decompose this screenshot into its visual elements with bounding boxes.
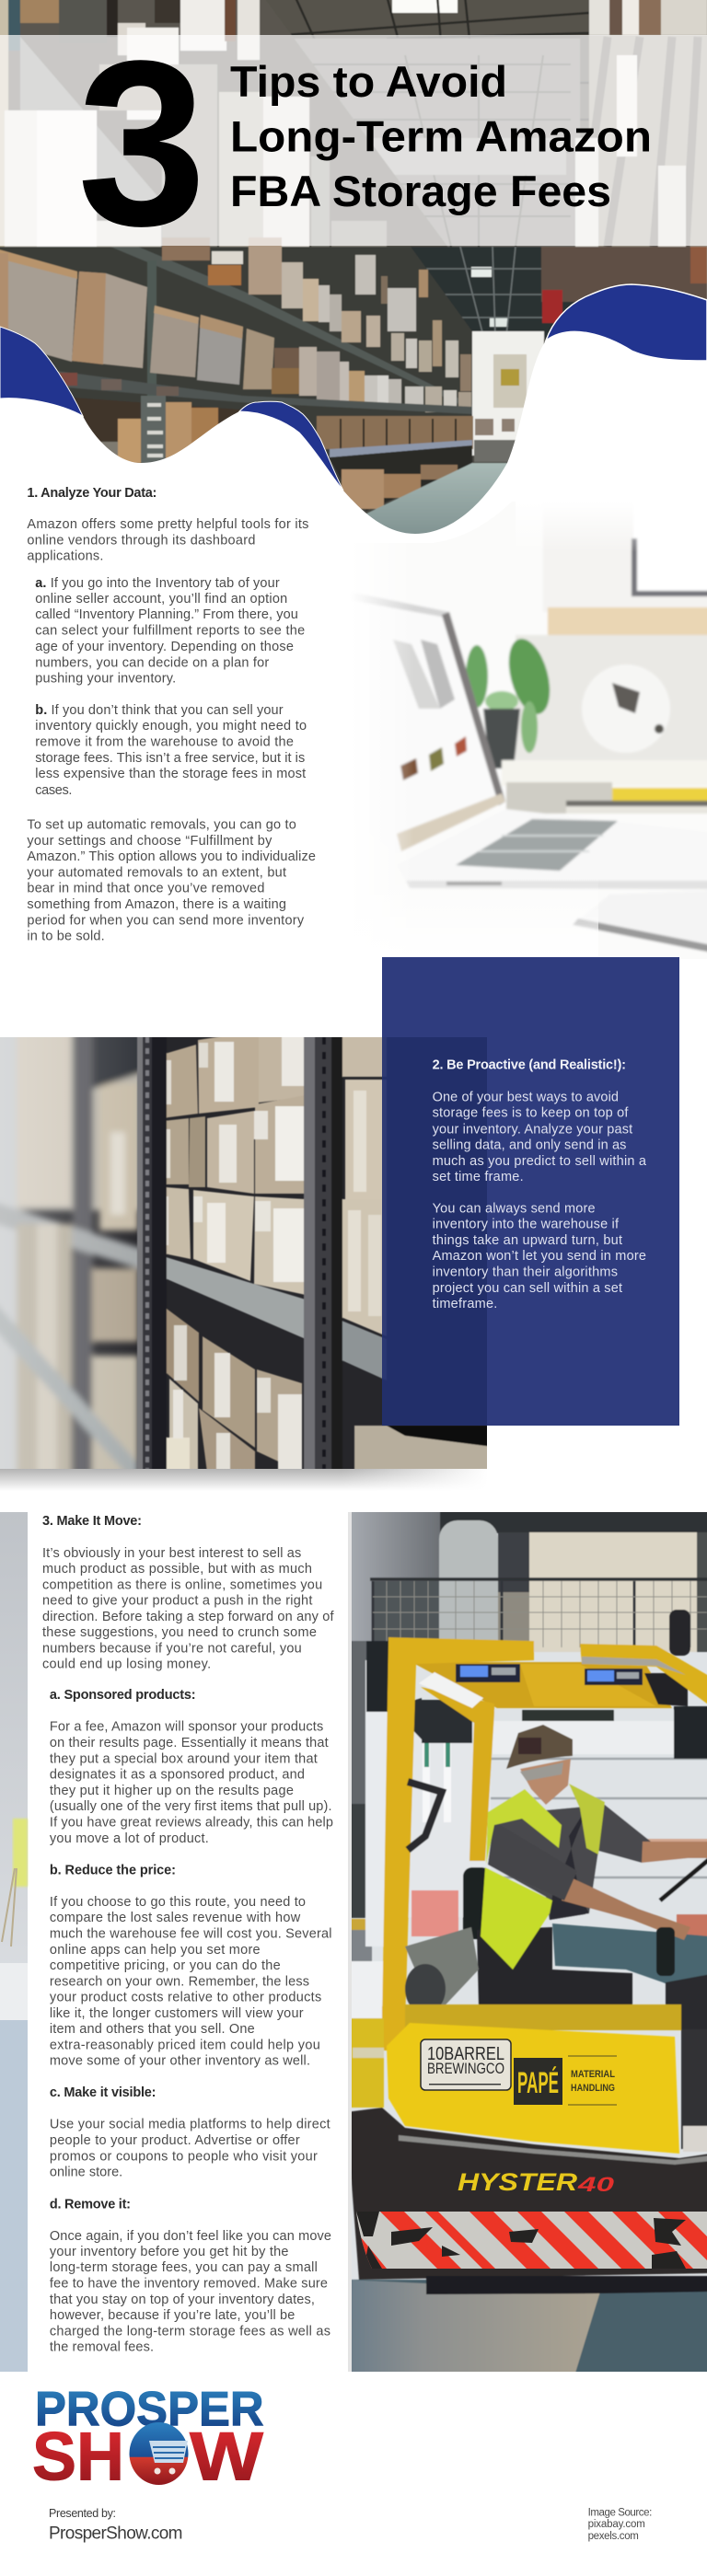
subsection a: Sponsored products: a. Sponsored products: xyxy=(50,1688,196,1703)
numeral 3: 3 xyxy=(77,12,206,275)
pape sticker: HANDLING xyxy=(571,2083,615,2094)
subsection b: Reduce the price xyxy=(50,1863,332,2069)
logo: Prosper Show: W xyxy=(190,2419,263,2494)
dark post columns xyxy=(142,1037,153,1469)
text block: 1. Analyze Your Data: a. If you go into the Inventory tab of your xyxy=(35,576,280,591)
text block: 1. Analyze Your Data: something from Amazon, there is a waiting xyxy=(27,897,286,912)
handle xyxy=(408,1782,442,1850)
text block: 3. Make It Move: 3. Make It Move: xyxy=(42,1514,142,1529)
text block: 1. Analyze Your Data: called “Inventory Planning.” From there, you xyxy=(35,607,298,622)
text block: 1. Analyze Your Data: in to be sold. xyxy=(27,930,105,944)
middle row boxes xyxy=(7,260,77,363)
cab frame xyxy=(382,1637,534,2025)
blurred left columns xyxy=(0,1026,143,1486)
photo: laptop on desk xyxy=(363,531,707,953)
subsection b: Reduce the price: If you choose to go this route, you need to xyxy=(50,1895,306,1910)
seat xyxy=(463,1867,491,1939)
text block: 1. Analyze Your Data: bear in mind that once you’ve removed xyxy=(27,882,264,896)
shelves xyxy=(166,1257,305,1338)
subsection c: Make it visible: online store. xyxy=(50,2166,122,2180)
title band xyxy=(0,35,707,246)
subsection d: Remove it: your inventory before you get hit by the xyxy=(50,2245,289,2259)
notebook xyxy=(573,890,707,950)
subsection c: Make it visible: promos or coupons to people who visit your xyxy=(50,2149,318,2164)
text block: 2. Be Proactive: inventory than their algorithms xyxy=(433,1265,618,1280)
10 barrel sticker: BREWINGCO xyxy=(427,2060,504,2077)
right upper racks xyxy=(589,0,707,313)
subsection a: Sponsored products: you move a lot of product. xyxy=(50,1831,209,1846)
photo: storage shelves with boxes xyxy=(0,1026,497,1486)
box labels xyxy=(214,1042,234,1102)
ceiling and trusses xyxy=(266,0,589,138)
subsection c: Make it visible xyxy=(50,2085,330,2180)
text block: 2. Be Proactive: One of your best ways to avoid xyxy=(433,1090,619,1104)
subsection a: Sponsored products: For a fee, Amazon will sponsor your products xyxy=(50,1720,323,1735)
fence xyxy=(373,1581,439,1642)
text block: 2. Be Proactive: set time frame. xyxy=(433,1170,524,1184)
black lower body xyxy=(346,2108,707,2280)
subsection a: Sponsored products: they put it higher up on the results page xyxy=(50,1784,294,1798)
hyster logo xyxy=(458,2168,615,2196)
logo: Prosper Show: PROSPER xyxy=(35,2382,264,2437)
pape sticker: PAPÉ xyxy=(517,2066,559,2099)
bucket xyxy=(411,1890,458,1936)
laptop base xyxy=(505,808,541,814)
text block: 2. Be Proactive: much as you predict to sell within a xyxy=(433,1154,647,1169)
text block: 2. Be Proactive: You can always send more xyxy=(433,1202,596,1217)
photo: warehouse aisle xyxy=(0,0,707,571)
safety vest xyxy=(481,1867,552,1970)
text block: 1. Analyze Your Data xyxy=(27,486,316,944)
subsection a: Sponsored products: (usually one of the very first items that pull up). xyxy=(50,1799,332,1814)
image source credits xyxy=(588,2508,652,2542)
title: Long-Term Amazon xyxy=(230,112,652,160)
text block: 1. Analyze Your Data: period for when you can send more inventory xyxy=(27,913,305,928)
text block: 1. Analyze Your Data: storage fees. This isn’t a free service, but it is xyxy=(35,751,305,766)
subsection d: Remove it: however, because if you’re late, you’ll be xyxy=(50,2308,295,2323)
lower row xyxy=(75,398,239,442)
subsection a: Sponsored products: designates it as a sponsored product, and xyxy=(50,1768,305,1783)
image source credits: pixabay.com xyxy=(588,2519,645,2530)
steering and controls xyxy=(660,1858,707,1900)
plant xyxy=(507,637,551,716)
white wave cut-out xyxy=(0,331,707,589)
hyster logo: 40 xyxy=(576,2173,615,2196)
subsection d: Remove it: d. Remove it: xyxy=(50,2197,131,2212)
subsection b: Reduce the price: item and others that you sell. One xyxy=(50,2022,255,2037)
panel: navy box background xyxy=(382,957,679,1426)
cream panel xyxy=(529,1532,697,1652)
text block: 2. Be Proactive xyxy=(433,1058,647,1311)
text block: 2. Be Proactive: 2. Be Proactive (and Realistic!): xyxy=(433,1058,626,1073)
text block: 2. Be Proactive: things take an upward turn, but xyxy=(433,1233,622,1248)
text block: 1. Analyze Your Data: age of your inventory. Depending on those xyxy=(35,640,294,654)
panel: navy overlay on photo xyxy=(382,1037,487,1426)
storage tank xyxy=(439,1520,498,1658)
white stack behind xyxy=(491,1710,707,1914)
title: Tips to Avoid xyxy=(230,57,507,106)
photo: forklift driver xyxy=(346,1509,707,2379)
text block: 1. Analyze Your Data: remove it from the warehouse to avoid the xyxy=(35,734,294,749)
presented by: Presented by: xyxy=(49,2507,116,2520)
subsection b: Reduce the price: your product costs relative to other products xyxy=(50,1990,321,2004)
subsection c: Make it visible: people to your product. Advertise or offer xyxy=(50,2133,300,2148)
subsection d: Remove it: charged the long-term storage fees as well as xyxy=(50,2324,330,2339)
text block: 1. Analyze Your Data: Amazon.” This option allows you to individualize xyxy=(27,849,316,864)
presented by xyxy=(49,2507,182,2543)
text block: 3. Make It Move: could end up losing money. xyxy=(42,1657,211,1671)
subsection b: Reduce the price: b. Reduce the price: xyxy=(50,1863,176,1877)
blue wave left xyxy=(0,327,83,416)
text block: 1. Analyze Your Data: online seller account, you’ll find an option xyxy=(35,592,287,606)
subsection b: Reduce the price: compare the lost sales revenue with how xyxy=(50,1911,301,1925)
logo: Prosper Show xyxy=(32,2382,264,2494)
icon: globe with shopping cart xyxy=(129,2422,188,2485)
photo shadow xyxy=(0,1469,488,1491)
subsection d: Remove it: fee to have the inventory removed. Make sure xyxy=(50,2276,328,2291)
text block: 3. Make It Move xyxy=(42,1514,334,2354)
black box and lamp xyxy=(366,1641,392,1712)
pape sticker: MATERIAL xyxy=(571,2069,615,2080)
subsection a: Sponsored products xyxy=(50,1688,333,1846)
driver head xyxy=(520,1759,571,1805)
subsection b: Reduce the price: much the warehouse fee will cost you. Several xyxy=(50,1926,332,1941)
text block: 3. Make It Move: competition as there is online, sometimes you xyxy=(42,1577,322,1592)
far ceiling xyxy=(411,247,595,339)
text block: 1. Analyze Your Data: 1. Analyze Your Data: xyxy=(27,486,156,501)
text block: 1. Analyze Your Data: Amazon offers some pretty helpful tools for its xyxy=(27,517,308,532)
image fades xyxy=(350,591,411,849)
subsection d: Remove it: the removal fees. xyxy=(50,2339,154,2354)
hazard stripes xyxy=(350,2212,707,2269)
subsection a: Sponsored products: If you have great reviews already, this can help xyxy=(50,1816,333,1831)
laptop screen xyxy=(350,592,505,855)
subsection c: Make it visible: Use your social media platforms to help direct xyxy=(50,2118,330,2132)
text block: 3. Make It Move: direction. Before taking a step forward on any of xyxy=(42,1610,334,1624)
subsection b: Reduce the price: move some of your other inventory as well. xyxy=(50,2054,310,2069)
subsection b: Reduce the price: like it, the longer customers will view your xyxy=(50,2006,304,2021)
text block: 1. Analyze Your Data: numbers, you can decide on a plan for xyxy=(35,655,269,670)
text block: 2. Be Proactive: inventory into the warehouse if xyxy=(433,1218,620,1232)
blue wave right xyxy=(546,284,707,361)
10 barrel sticker xyxy=(421,2039,511,2090)
logo: Prosper Show: SH xyxy=(32,2419,124,2494)
text block: 2. Be Proactive: selling data, and only send in as xyxy=(433,1138,626,1153)
text block: 1. Analyze Your Data: can select your fulfillment reports to see the xyxy=(35,624,305,639)
hyster logo: HYSTER xyxy=(458,2168,578,2196)
image source credits: Image Source: xyxy=(588,2508,652,2519)
title xyxy=(230,57,652,215)
presented by: ProsperShow.com xyxy=(49,2524,182,2543)
text block: 1. Analyze Your Data: cases. xyxy=(35,783,72,798)
text block: 3. Make It Move: need to give your product a push in the right xyxy=(42,1594,312,1609)
books xyxy=(502,760,707,786)
floor xyxy=(346,2280,707,2379)
cylinder xyxy=(405,1927,479,2016)
far end wall xyxy=(472,331,544,456)
text block: 1. Analyze Your Data: inventory quickly enough, you might need to xyxy=(35,719,307,734)
subsection a: Sponsored products: on their results page. Essentially it means that xyxy=(50,1736,329,1750)
subsection d: Remove it: long-term storage fees, you can pay a small xyxy=(50,2260,318,2275)
canopy xyxy=(411,1662,672,1708)
background wall and ceiling xyxy=(439,1512,707,1533)
text block: 3. Make It Move: numbers because if you’re not careful, you xyxy=(42,1641,302,1656)
left lower rack body xyxy=(0,247,472,488)
legs xyxy=(552,1923,707,2003)
subsection d: Remove it xyxy=(50,2197,331,2354)
lower boxes xyxy=(167,1309,199,1402)
upper row boxes xyxy=(162,237,210,260)
text block: 1. Analyze Your Data: applications. xyxy=(27,549,103,564)
section 3 side strip xyxy=(0,1512,352,2372)
top rack beam xyxy=(110,247,472,410)
text block: 2. Be Proactive: project you can sell within a set xyxy=(433,1281,622,1296)
text block: 2. Be Proactive: your inventory. Analyze your past xyxy=(433,1122,632,1137)
text block: 1. Analyze Your Data: your settings and choose “Fulfillment by xyxy=(27,834,272,849)
text block: 2. Be Proactive: Amazon won’t let you send in more xyxy=(433,1249,646,1264)
globe xyxy=(582,664,670,753)
text block: 1. Analyze Your Data: online vendors through its dashboard xyxy=(27,534,255,549)
floor xyxy=(366,462,507,534)
text block: 3. Make It Move: much product as possible, but with as much xyxy=(42,1562,312,1577)
text block: 1. Analyze Your Data: b. If you don’t think that you can sell your xyxy=(35,703,284,718)
text block: 1. Analyze Your Data: pushing your inventory. xyxy=(35,672,176,687)
text block: 2. Be Proactive: storage fees is to keep on top of xyxy=(433,1106,629,1121)
subsection b: Reduce the price: research on your own. Remember, the less xyxy=(50,1974,309,1989)
text block: 1. Analyze Your Data: your automated removals to an extent, but xyxy=(27,865,286,880)
subsection b: Reduce the price: online apps can help you set more xyxy=(50,1943,261,1958)
subsection b: Reduce the price: competitive pricing, or you can do the xyxy=(50,1958,281,1973)
pape sticker xyxy=(514,2056,617,2105)
subsection d: Remove it: Once again, if you don’t feel like you can move xyxy=(50,2229,331,2244)
top shelf boxes xyxy=(166,1044,199,1119)
text block: 2. Be Proactive: timeframe. xyxy=(433,1297,497,1311)
beam with labels xyxy=(56,371,472,414)
subsection c: Make it visible: c. Make it visible: xyxy=(50,2085,156,2100)
10 barrel sticker: 10BARREL xyxy=(427,2044,504,2064)
text block: 1. Analyze Your Data: less expensive than the storage fees in most xyxy=(35,767,306,781)
title: FBA Storage Fees xyxy=(230,167,611,215)
text block: 3. Make It Move: these suggestions, you need to crunch some xyxy=(42,1625,317,1640)
dark shirt xyxy=(488,1805,651,1920)
text block: 1. Analyze Your Data: To set up automatic removals, you can go to xyxy=(27,818,296,833)
subsection b: Reduce the price: extra-reasonably priced item could help you xyxy=(50,2038,320,2052)
text block: 3. Make It Move: It’s obviously in your best interest to sell as xyxy=(42,1546,301,1561)
subsection d: Remove it: that you stay on top of your inventory dates, xyxy=(50,2293,315,2307)
left upper racks xyxy=(8,0,447,248)
blue wave middle xyxy=(239,401,343,491)
rear body xyxy=(405,2004,681,2030)
subsection a: Sponsored products: they put a special box around your item that xyxy=(50,1751,318,1766)
image source credits: pexels.com xyxy=(588,2531,639,2542)
blue lights xyxy=(456,1664,520,1682)
